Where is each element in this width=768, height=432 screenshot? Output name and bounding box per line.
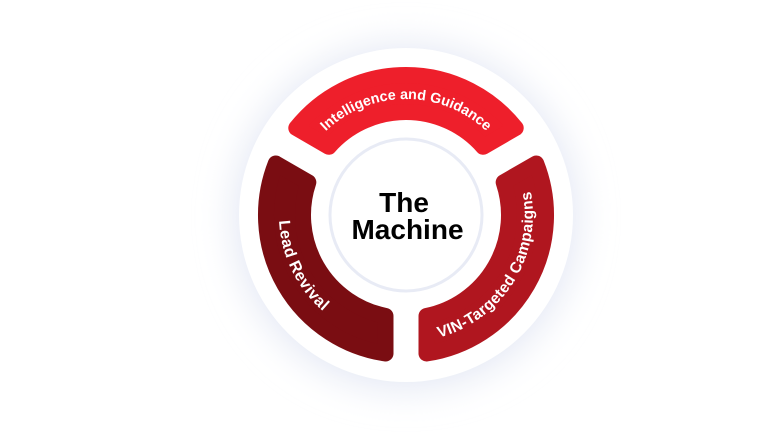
segment: Intelligence and Guidance	[288, 67, 524, 155]
segment: Lead Revival	[258, 156, 394, 362]
soft glow behind the disc	[234, 45, 578, 389]
center hub ring	[330, 139, 482, 291]
white outer disc	[239, 48, 573, 382]
center title: The	[379, 187, 429, 218]
segment: Lead Revival: Lead Revival	[279, 220, 330, 310]
center title: Machine	[351, 214, 464, 245]
segment: Intelligence and Guidance: Intelligence and Guidance	[320, 90, 490, 131]
segment: VIN-Targeted Campaigns	[418, 156, 554, 362]
segment: VIN-Targeted Campaigns: VIN-Targeted Campaigns	[436, 192, 536, 336]
